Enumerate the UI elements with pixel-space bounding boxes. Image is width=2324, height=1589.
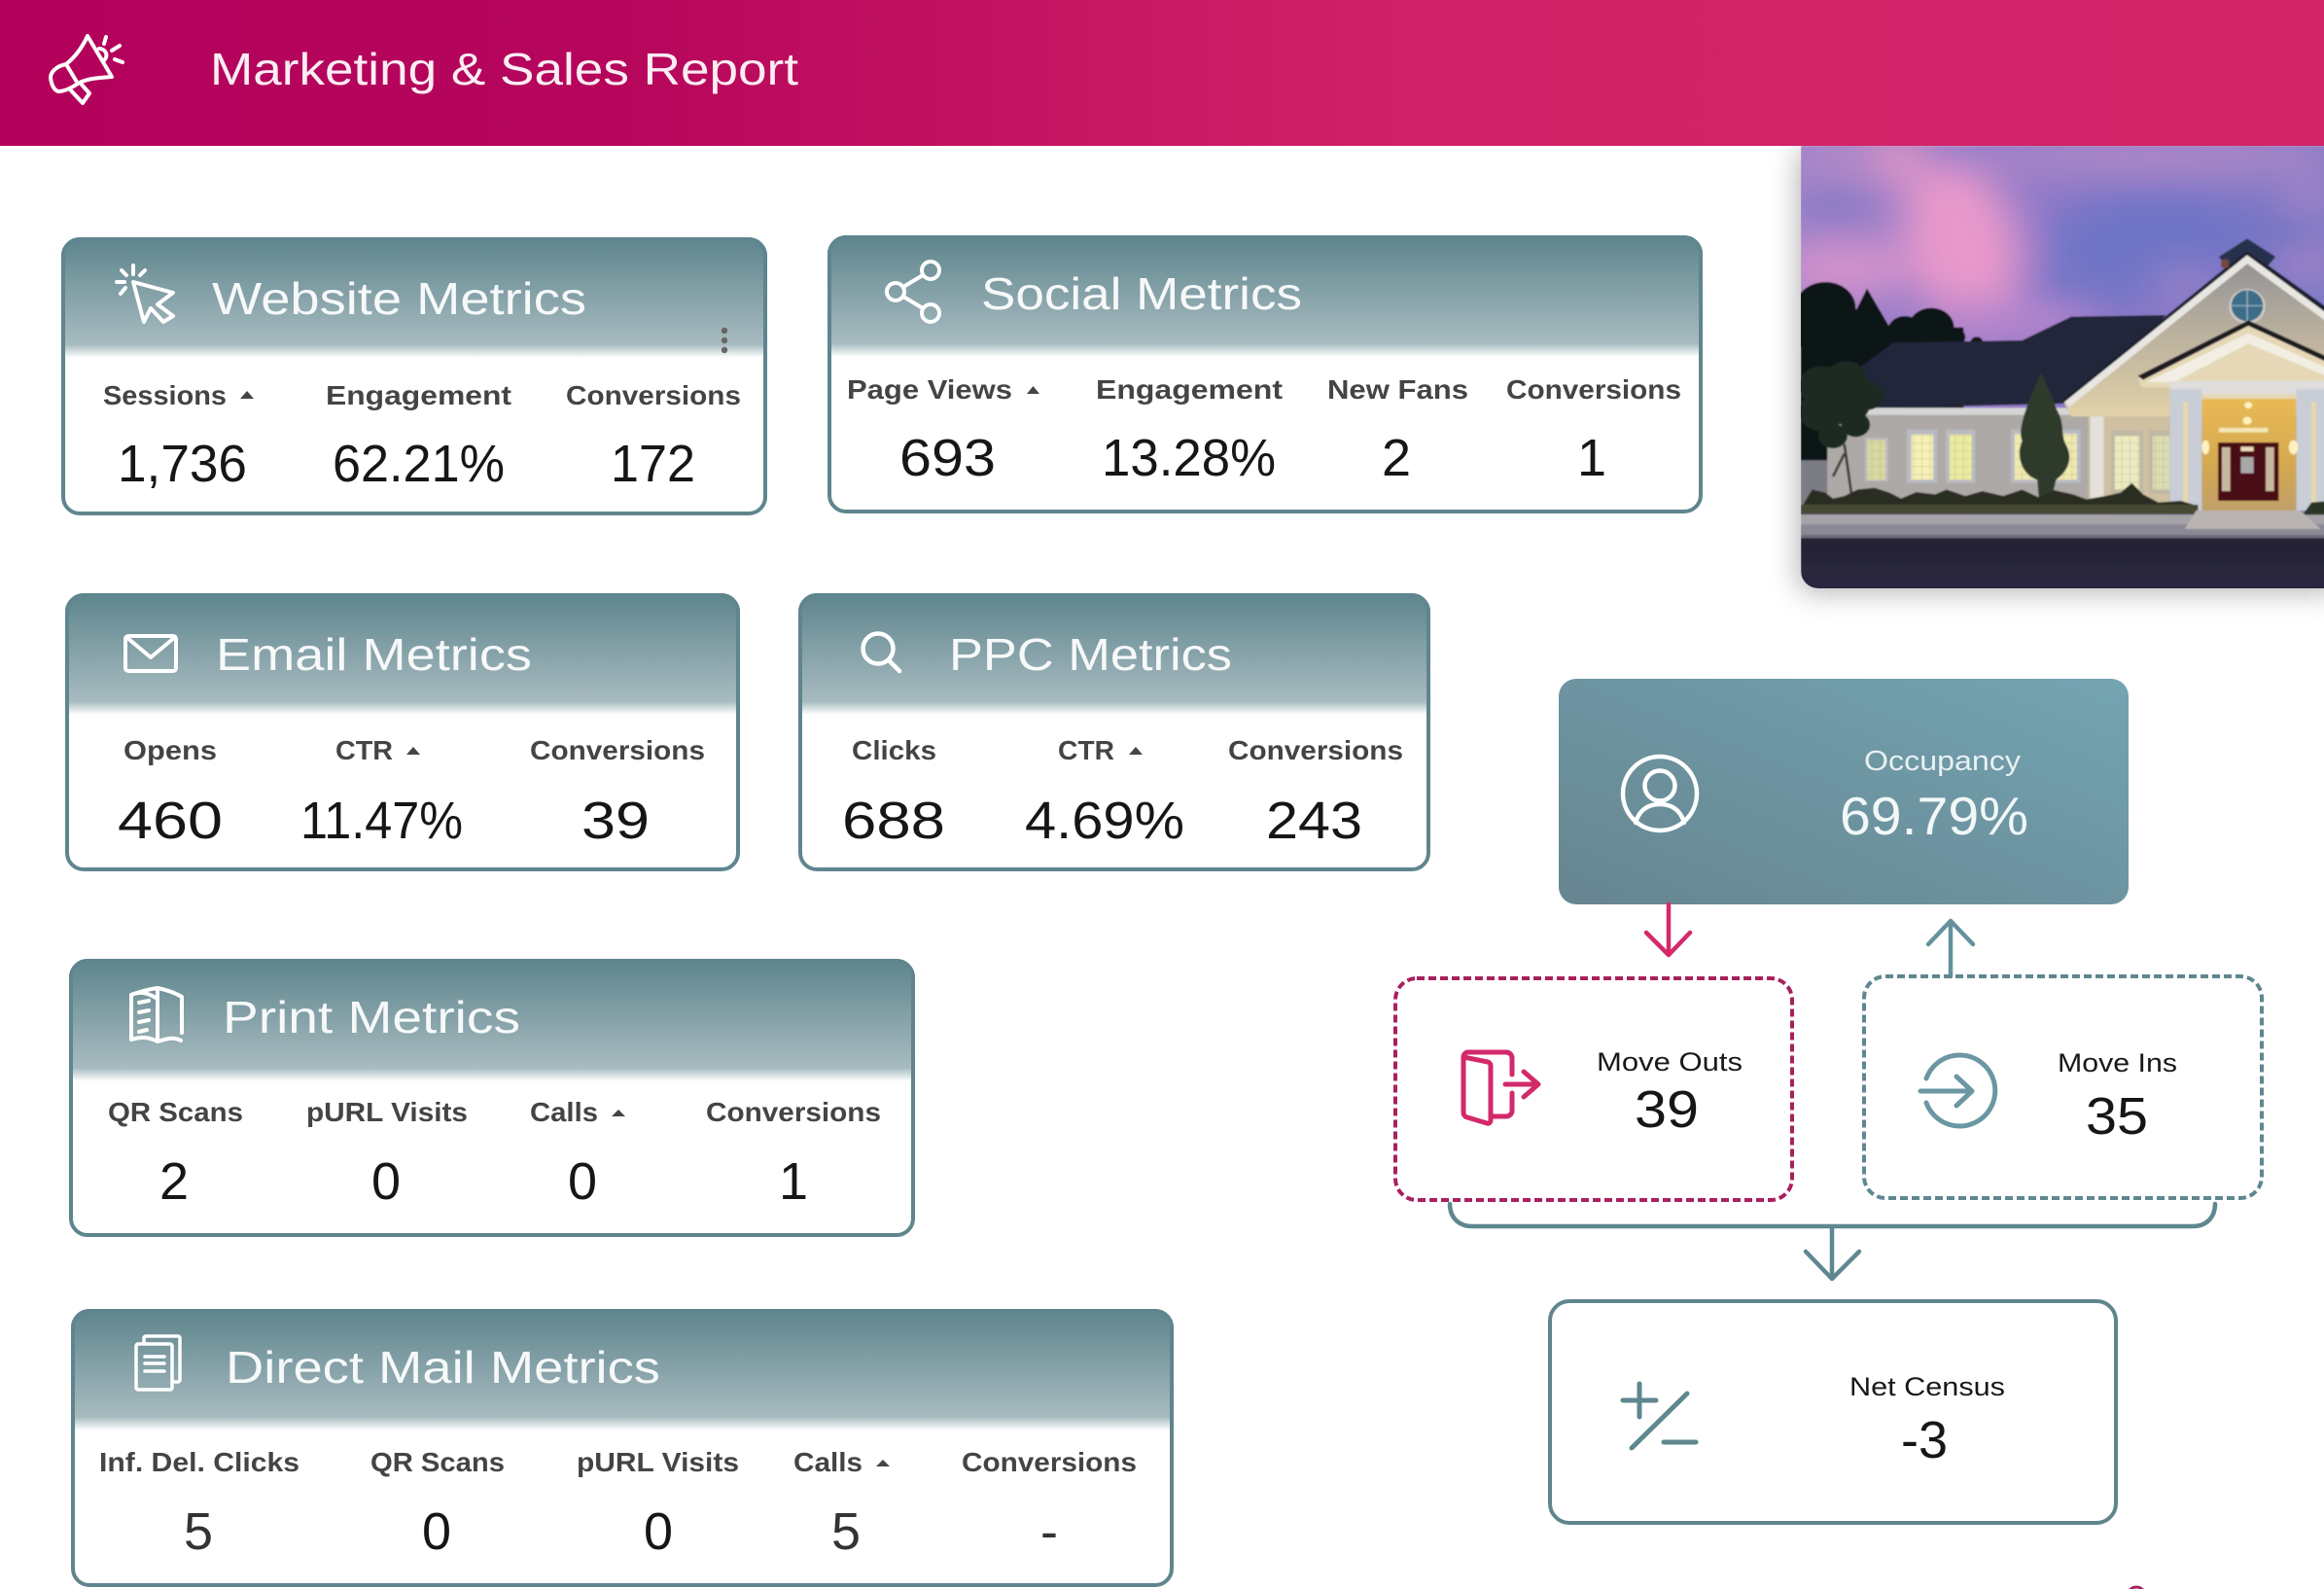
label: Move Outs bbox=[1597, 1047, 1743, 1077]
value: -3 bbox=[1901, 1411, 1948, 1469]
column values: 5 bbox=[184, 1502, 213, 1561]
heading: Email Metrics bbox=[216, 629, 532, 680]
card background bbox=[827, 235, 1703, 513]
icon: circle enter bbox=[1920, 1055, 1995, 1126]
column values: 2 bbox=[1382, 429, 1411, 487]
icon: share bbox=[887, 262, 939, 322]
label: Move Ins bbox=[2058, 1048, 2177, 1077]
card background bbox=[61, 237, 767, 515]
panel: email metrics bbox=[65, 593, 740, 871]
card background bbox=[798, 593, 1430, 871]
card header bbox=[61, 237, 767, 358]
column labels: Conversions bbox=[530, 735, 705, 765]
heading: Social Metrics bbox=[981, 268, 1302, 319]
lawn and pavement bbox=[1801, 505, 2198, 514]
card header bbox=[798, 593, 1430, 715]
panel: direct mail metrics bbox=[71, 1309, 1174, 1587]
column values bbox=[184, 1502, 1058, 1561]
panel: occupancy bbox=[1559, 679, 2129, 904]
icon: envelope bbox=[125, 636, 176, 671]
heading: Direct Mail Metrics bbox=[226, 1342, 660, 1393]
card header bbox=[69, 959, 915, 1081]
column labels: Calls bbox=[530, 1097, 598, 1127]
card background bbox=[65, 593, 740, 871]
column values bbox=[118, 792, 650, 850]
column labels bbox=[847, 374, 1681, 405]
main roof bbox=[1861, 315, 2166, 408]
column labels: Clicks bbox=[852, 735, 936, 765]
column labels: pURL Visits bbox=[306, 1097, 468, 1127]
menu dots bbox=[722, 328, 727, 353]
column values: 1,736 bbox=[118, 435, 247, 493]
round window bbox=[2229, 289, 2266, 324]
icon: documents bbox=[136, 1336, 180, 1390]
shrubs bbox=[1803, 482, 2194, 506]
value: 69.79% bbox=[1840, 786, 2028, 846]
label: Net Census bbox=[1849, 1372, 2005, 1401]
column values: 243 bbox=[1266, 792, 1362, 850]
column values: 4.69% bbox=[1025, 792, 1184, 850]
photo image bbox=[1777, 133, 2324, 593]
column labels: Conversions bbox=[706, 1097, 881, 1127]
column labels: Sessions bbox=[103, 380, 227, 410]
card background bbox=[71, 1309, 1174, 1587]
arrow: occupancy to move outs bbox=[1646, 904, 1690, 955]
mark: cropped pink circle bbox=[2128, 1587, 2145, 1589]
card header bbox=[65, 593, 740, 715]
panel: print metrics bbox=[69, 959, 915, 1237]
card frame bbox=[829, 237, 1701, 512]
icon: person in circle bbox=[1623, 757, 1697, 830]
column labels: Conversions bbox=[962, 1447, 1137, 1477]
photo: building at dusk bbox=[1777, 133, 2324, 593]
column values: 1 bbox=[779, 1152, 808, 1211]
column values: - bbox=[1040, 1502, 1058, 1561]
column values: 39 bbox=[581, 792, 650, 850]
occupancy background bbox=[1559, 679, 2129, 904]
card frame bbox=[63, 239, 765, 513]
column labels: Page Views bbox=[847, 374, 1012, 405]
column labels: Inf. Del. Clicks bbox=[99, 1447, 299, 1477]
icon: cursor click bbox=[117, 265, 173, 322]
value: 39 bbox=[1635, 1080, 1699, 1139]
column values bbox=[899, 429, 1606, 487]
windows bbox=[1865, 438, 1887, 481]
icon: magnifier bbox=[863, 634, 899, 671]
column labels: Engagement bbox=[1096, 374, 1283, 405]
card frame bbox=[73, 1311, 1172, 1585]
icon: open book bbox=[131, 988, 182, 1042]
column labels: Calls bbox=[793, 1447, 863, 1477]
column labels: pURL Visits bbox=[577, 1447, 739, 1477]
panel: ppc metrics bbox=[798, 593, 1430, 871]
frame bbox=[1550, 1301, 2116, 1523]
left wall bbox=[1801, 460, 1828, 504]
column values bbox=[159, 1152, 808, 1211]
icon: door exit bbox=[1463, 1052, 1538, 1123]
column values: 11.47% bbox=[300, 792, 463, 850]
column values: 688 bbox=[842, 792, 945, 850]
value: 35 bbox=[2086, 1087, 2148, 1146]
panel: website metrics bbox=[61, 237, 767, 515]
column labels: QR Scans bbox=[370, 1447, 505, 1477]
column values: 1 bbox=[1577, 429, 1606, 487]
panel: move outs bbox=[1395, 978, 1792, 1200]
card header bbox=[827, 235, 1703, 357]
column values: 0 bbox=[371, 1152, 401, 1211]
header bar bbox=[0, 0, 2324, 146]
panel: net census bbox=[1550, 1301, 2116, 1523]
column values: 172 bbox=[611, 435, 695, 493]
column labels: CTR bbox=[1058, 735, 1114, 765]
heading: PPC Metrics bbox=[949, 629, 1232, 680]
dashed frame bbox=[1395, 978, 1792, 1200]
card background bbox=[69, 959, 915, 1237]
card frame bbox=[800, 595, 1428, 869]
cupola bbox=[2219, 238, 2275, 266]
column values: 13.28% bbox=[1102, 429, 1276, 487]
column labels: Conversions bbox=[566, 380, 741, 410]
column labels: New Fans bbox=[1327, 374, 1468, 405]
column values: 0 bbox=[644, 1502, 673, 1561]
inner gable bbox=[2137, 321, 2324, 399]
column values bbox=[842, 792, 1362, 850]
dashed frame bbox=[1864, 976, 2262, 1198]
panel: social metrics bbox=[827, 235, 1703, 513]
column values: 5 bbox=[831, 1502, 861, 1561]
photo shadow bbox=[1797, 146, 2324, 593]
heading: Print Metrics bbox=[223, 992, 520, 1042]
column labels bbox=[99, 1447, 1137, 1477]
column labels bbox=[852, 735, 1403, 765]
column labels bbox=[123, 735, 705, 765]
card header bbox=[71, 1309, 1174, 1430]
column values: 0 bbox=[568, 1152, 597, 1211]
green tree bbox=[1799, 362, 1884, 448]
column labels: QR Scans bbox=[108, 1097, 243, 1127]
icon: megaphone bbox=[51, 36, 123, 103]
column labels bbox=[103, 380, 741, 410]
label: Occupancy bbox=[1864, 746, 2022, 777]
column values bbox=[118, 435, 695, 493]
entry bbox=[2201, 399, 2297, 511]
connector: bracket and arrow to net census bbox=[1450, 1204, 2215, 1279]
column values: 62.21% bbox=[333, 435, 505, 493]
column labels: Opens bbox=[123, 735, 217, 765]
centre tree bbox=[2020, 372, 2069, 503]
column labels: CTR bbox=[335, 735, 393, 765]
gable facade bbox=[2063, 253, 2324, 416]
heading: Website Metrics bbox=[212, 273, 586, 324]
column values: 2 bbox=[159, 1152, 189, 1211]
porch bbox=[2089, 416, 2169, 504]
column values: 0 bbox=[422, 1502, 451, 1561]
column labels: Conversions bbox=[1506, 374, 1681, 405]
panel: move ins bbox=[1864, 976, 2262, 1198]
icon: plus minus bbox=[1623, 1384, 1696, 1448]
card frame bbox=[71, 961, 913, 1235]
column values: 693 bbox=[899, 429, 996, 487]
dark tree line bbox=[1801, 281, 1984, 461]
column labels: Engagement bbox=[326, 380, 511, 410]
column labels bbox=[108, 1097, 881, 1127]
column labels: Conversions bbox=[1228, 735, 1403, 765]
column values: 460 bbox=[118, 792, 223, 850]
title: Marketing & Sales Report bbox=[210, 44, 798, 94]
card frame bbox=[67, 595, 738, 869]
arrow: move ins to occupancy bbox=[1928, 921, 1973, 976]
